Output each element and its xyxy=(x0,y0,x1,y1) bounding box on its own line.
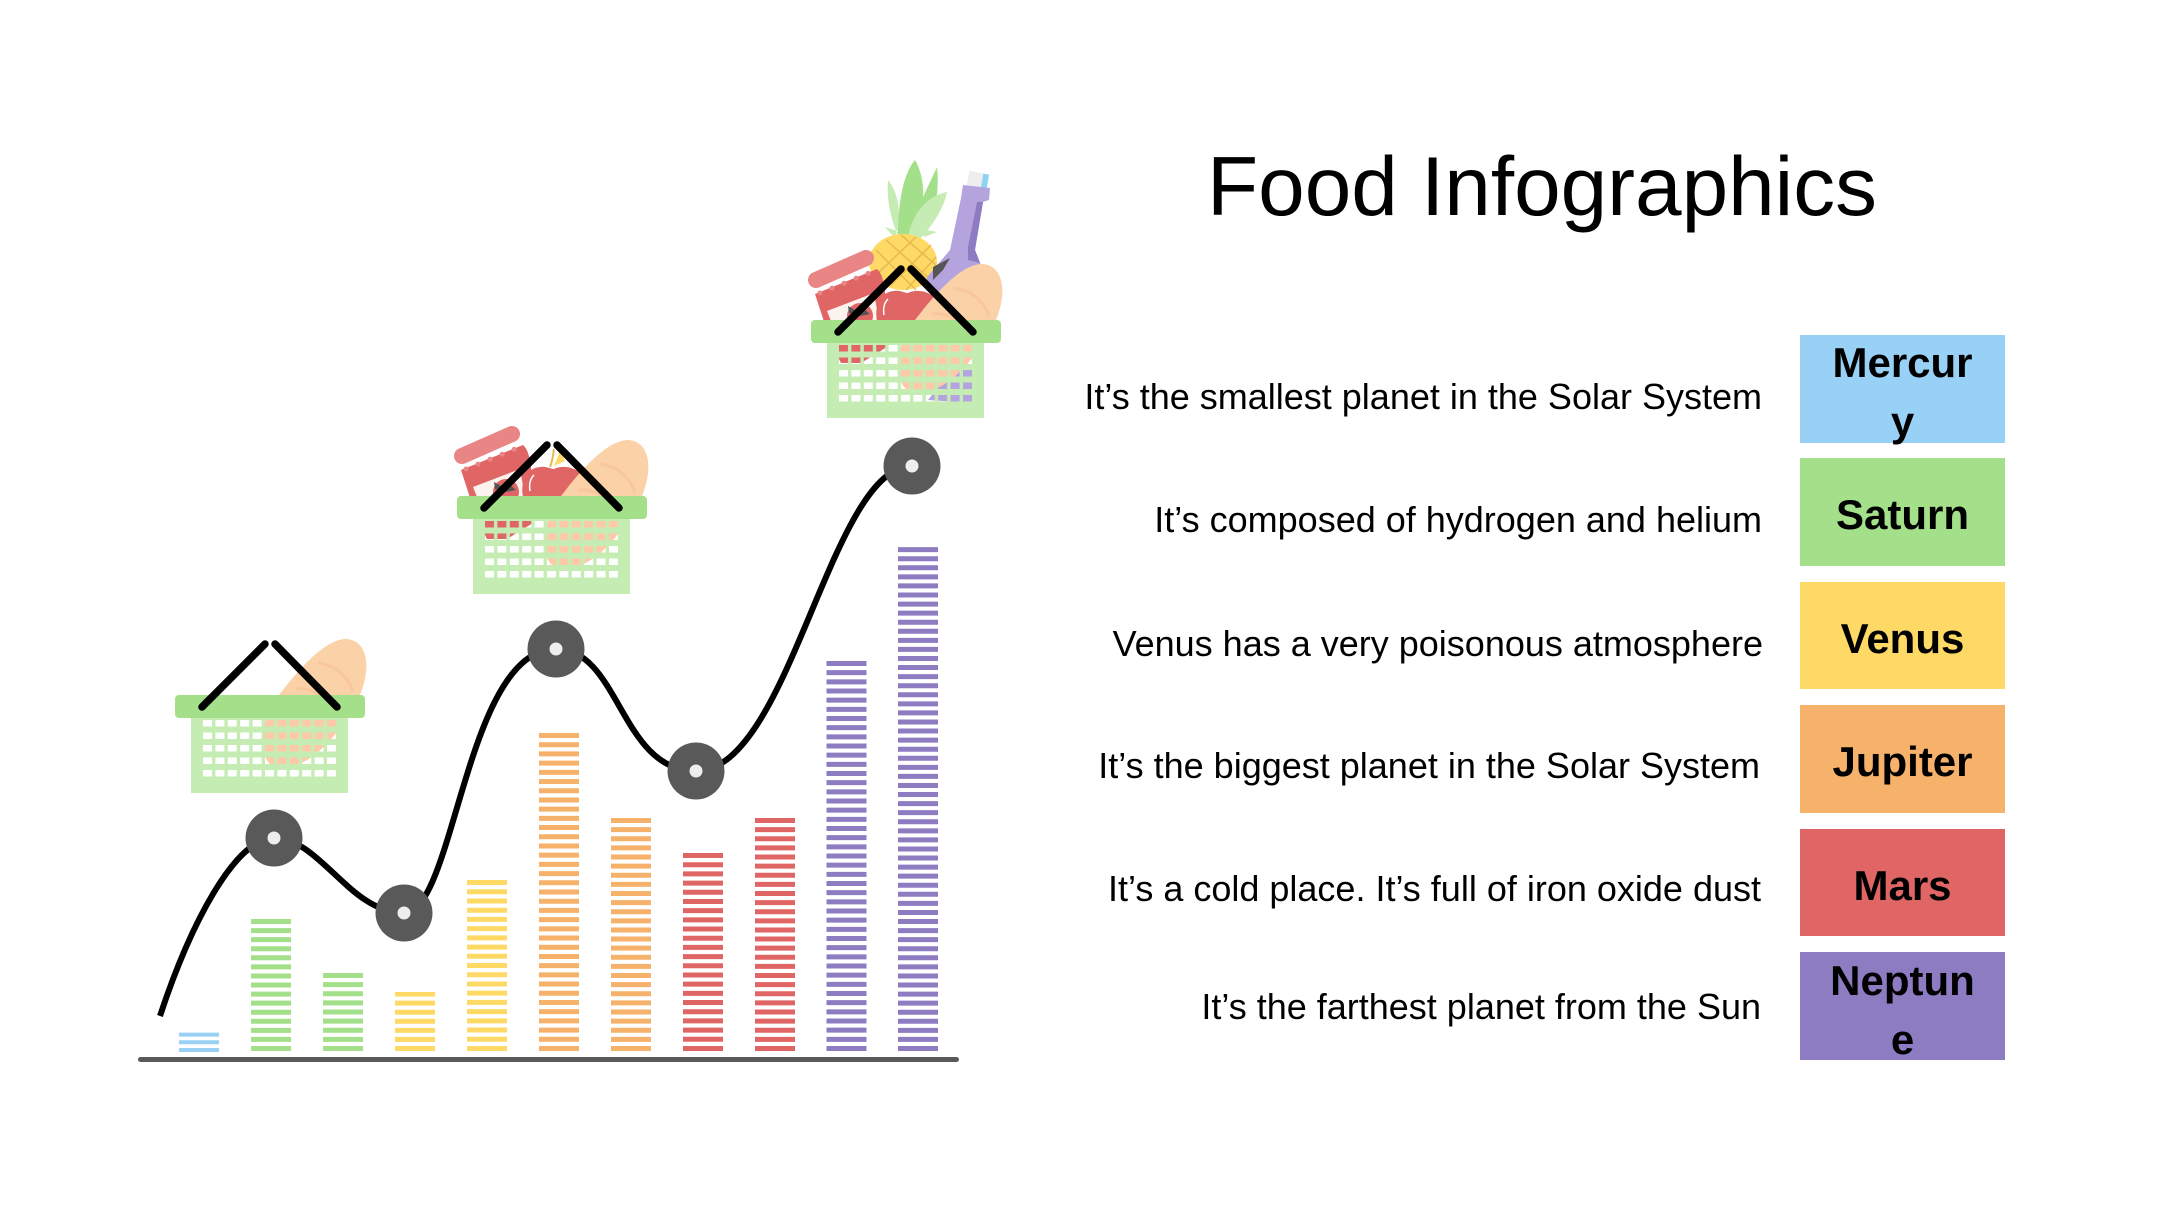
icon: full basket with pineapple, wine, jam, apple and bread xyxy=(811,160,1002,418)
description: Mars: It’s a cold place. It’s full of iron oxide dust xyxy=(1108,868,1761,909)
description: Jupiter: It’s the biggest planet in the Solar System xyxy=(1098,745,1760,786)
bar chart xyxy=(199,547,918,1052)
label: Mercury: Mercury xyxy=(1832,339,1973,445)
label: Jupiter: Jupiter xyxy=(1832,738,1973,785)
apple xyxy=(522,449,580,497)
bar 5 yellow xyxy=(467,880,507,1051)
basket handles xyxy=(484,445,619,508)
trend curve xyxy=(160,466,912,1016)
bar 10 purple xyxy=(826,661,866,1051)
bar 2 green xyxy=(251,919,291,1051)
basket body xyxy=(827,343,984,418)
label: Mars xyxy=(1800,828,2005,936)
label: Saturn xyxy=(1800,458,2005,566)
bread xyxy=(262,639,366,768)
basket rim xyxy=(811,320,1001,343)
description: Venus: Venus has a very poisonous atmosphere xyxy=(1113,623,1763,664)
label: Venus xyxy=(1800,582,2005,689)
bar 8 red xyxy=(683,853,723,1051)
jam jar xyxy=(815,258,887,363)
marker 1 xyxy=(246,810,302,866)
label: Mercury xyxy=(1800,335,2005,442)
basket handles xyxy=(838,269,973,332)
label: Mars: Mars xyxy=(1853,862,1952,908)
basket rim xyxy=(457,496,647,519)
baseline axis xyxy=(138,1057,959,1062)
jam jar xyxy=(461,434,533,539)
basket handles xyxy=(202,644,337,707)
curve markers xyxy=(246,438,940,942)
pineapple xyxy=(869,160,947,290)
wine bottle xyxy=(927,171,990,403)
marker 4 xyxy=(668,742,724,800)
bar 7 orange xyxy=(611,818,651,1051)
bar 11 purple xyxy=(898,547,938,1051)
basket body xyxy=(473,519,630,594)
bar 6 orange xyxy=(539,733,579,1051)
bar 3 green xyxy=(323,973,363,1051)
description: Saturn: It’s composed of hydrogen and helium xyxy=(1154,499,1762,540)
bar 4 yellow xyxy=(395,992,435,1051)
label: Neptune xyxy=(1800,952,2005,1060)
bar 1 blue xyxy=(179,1032,219,1052)
description: Neptune: It’s the farthest planet from the Sun xyxy=(1201,986,1761,1027)
bread xyxy=(898,264,1002,393)
description: Mercury: It’s the smallest planet in the Solar System xyxy=(1084,376,1762,417)
label: Venus: Venus xyxy=(1841,614,1964,662)
label: Jupiter xyxy=(1800,705,2005,812)
label: Saturn: Saturn xyxy=(1836,491,1969,538)
apple xyxy=(876,291,934,321)
bread xyxy=(544,440,648,569)
chart illustration xyxy=(138,160,1002,1062)
bar 9 red xyxy=(755,818,795,1051)
icon: basket with jam, apple and bread xyxy=(457,434,648,594)
title: Food Infographics xyxy=(1207,139,1877,233)
marker 3 xyxy=(528,620,584,678)
basket body xyxy=(191,718,348,793)
marker 2 xyxy=(376,884,432,942)
marker 5 xyxy=(884,438,940,494)
icon: basket with bread xyxy=(175,639,366,793)
label: Neptune: Neptune xyxy=(1830,957,1975,1063)
basket rim xyxy=(175,695,365,718)
